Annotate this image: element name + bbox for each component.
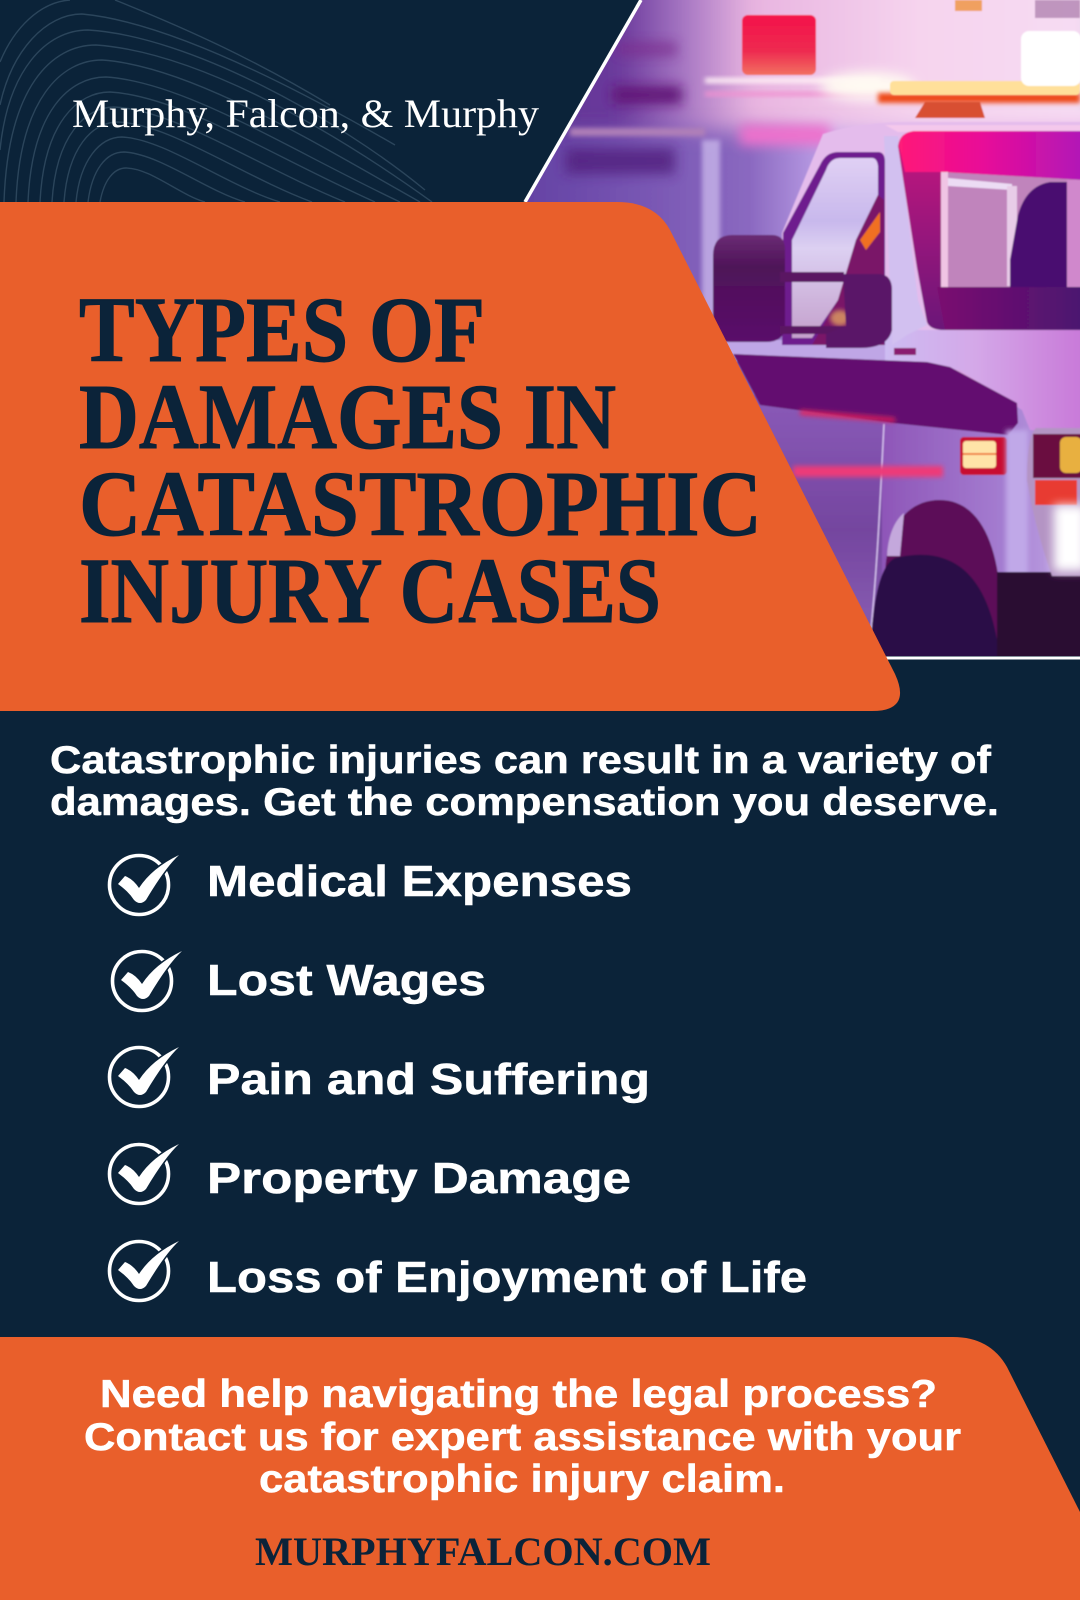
right body panel xyxy=(882,395,1080,665)
header firm name: Murphy, Falcon, & Murphy xyxy=(72,91,539,136)
interior window xyxy=(942,172,1080,287)
amber roof lamp bar xyxy=(878,81,1080,118)
call-to-action text: Need help navigating the legal process? xyxy=(100,1373,937,1416)
call-to-action text xyxy=(84,1373,961,1501)
title: DAMAGES IN xyxy=(79,366,616,469)
pillar xyxy=(884,136,927,345)
title: TYPES OF xyxy=(79,279,485,382)
item: medical expenses: Medical Expenses xyxy=(207,857,632,906)
item: pain and suffering: Pain and Suffering xyxy=(207,1055,650,1104)
orange call-to-action panel xyxy=(0,1337,1080,1600)
item: property damage: Property Damage xyxy=(207,1154,631,1203)
cab top xyxy=(782,122,1080,344)
upper background xyxy=(500,0,1080,130)
icon: check xyxy=(110,1144,179,1204)
panel seam xyxy=(870,424,884,640)
pink streak xyxy=(793,466,943,477)
fender pale strip xyxy=(1006,430,1028,575)
item: loss of enjoyment of life xyxy=(110,1241,807,1302)
mid background xyxy=(527,112,1080,396)
door window xyxy=(782,152,885,345)
icon: check xyxy=(110,1047,179,1106)
title: CATASTROPHIC xyxy=(79,453,762,556)
wheel arch xyxy=(884,499,998,640)
motion streaks xyxy=(565,42,880,340)
windshield xyxy=(898,131,1080,330)
roof red marker light xyxy=(742,15,816,75)
wing mirror xyxy=(713,235,892,348)
photo: ambulance xyxy=(480,0,1080,665)
item: pain and suffering xyxy=(110,1047,650,1106)
icon: check xyxy=(110,855,179,914)
call-to-action text: Contact us for expert assistance with your xyxy=(84,1416,961,1459)
item: medical expenses xyxy=(110,855,632,914)
door handle xyxy=(894,348,916,355)
intro text: Catastrophic injuries can result in a variety of xyxy=(50,739,992,782)
top small lamp xyxy=(955,0,982,11)
item: lost wages xyxy=(112,951,486,1010)
tyre xyxy=(870,555,1000,660)
bumper xyxy=(997,572,1080,660)
dashboard xyxy=(937,287,1080,330)
left body panel xyxy=(700,395,892,665)
item: lost wages: Lost Wages xyxy=(207,956,486,1005)
white diagonal line xyxy=(525,0,641,202)
title xyxy=(79,279,762,643)
item: loss of enjoyment of life: Loss of Enjoyment of Life xyxy=(207,1253,807,1302)
hood xyxy=(885,330,1080,435)
wheel arch rim highlight xyxy=(887,513,904,556)
icon: check xyxy=(112,951,182,1010)
side stripe xyxy=(733,354,1018,435)
headlight xyxy=(1027,428,1080,576)
orange hero panel xyxy=(0,202,900,711)
website url: MURPHYFALCON.COM xyxy=(255,1529,711,1574)
decorative contour lines xyxy=(0,0,432,202)
checklist xyxy=(110,855,807,1302)
title: INJURY CASES xyxy=(79,540,661,643)
intro text xyxy=(50,739,999,824)
stripe red reflection xyxy=(800,410,895,422)
item: property damage xyxy=(110,1144,631,1204)
icon: check xyxy=(110,1241,179,1300)
intro text: damages. Get the compensation you deserve. xyxy=(50,781,999,824)
call-to-action text: catastrophic injury claim. xyxy=(259,1458,785,1501)
dark top corner xyxy=(1035,0,1080,18)
small amber side lamp xyxy=(960,437,1007,475)
white glow xyxy=(820,72,916,100)
band below door xyxy=(725,340,1025,362)
white upper light xyxy=(1021,31,1080,86)
roof line highlight xyxy=(885,125,1080,132)
white photo underline xyxy=(880,656,1080,660)
